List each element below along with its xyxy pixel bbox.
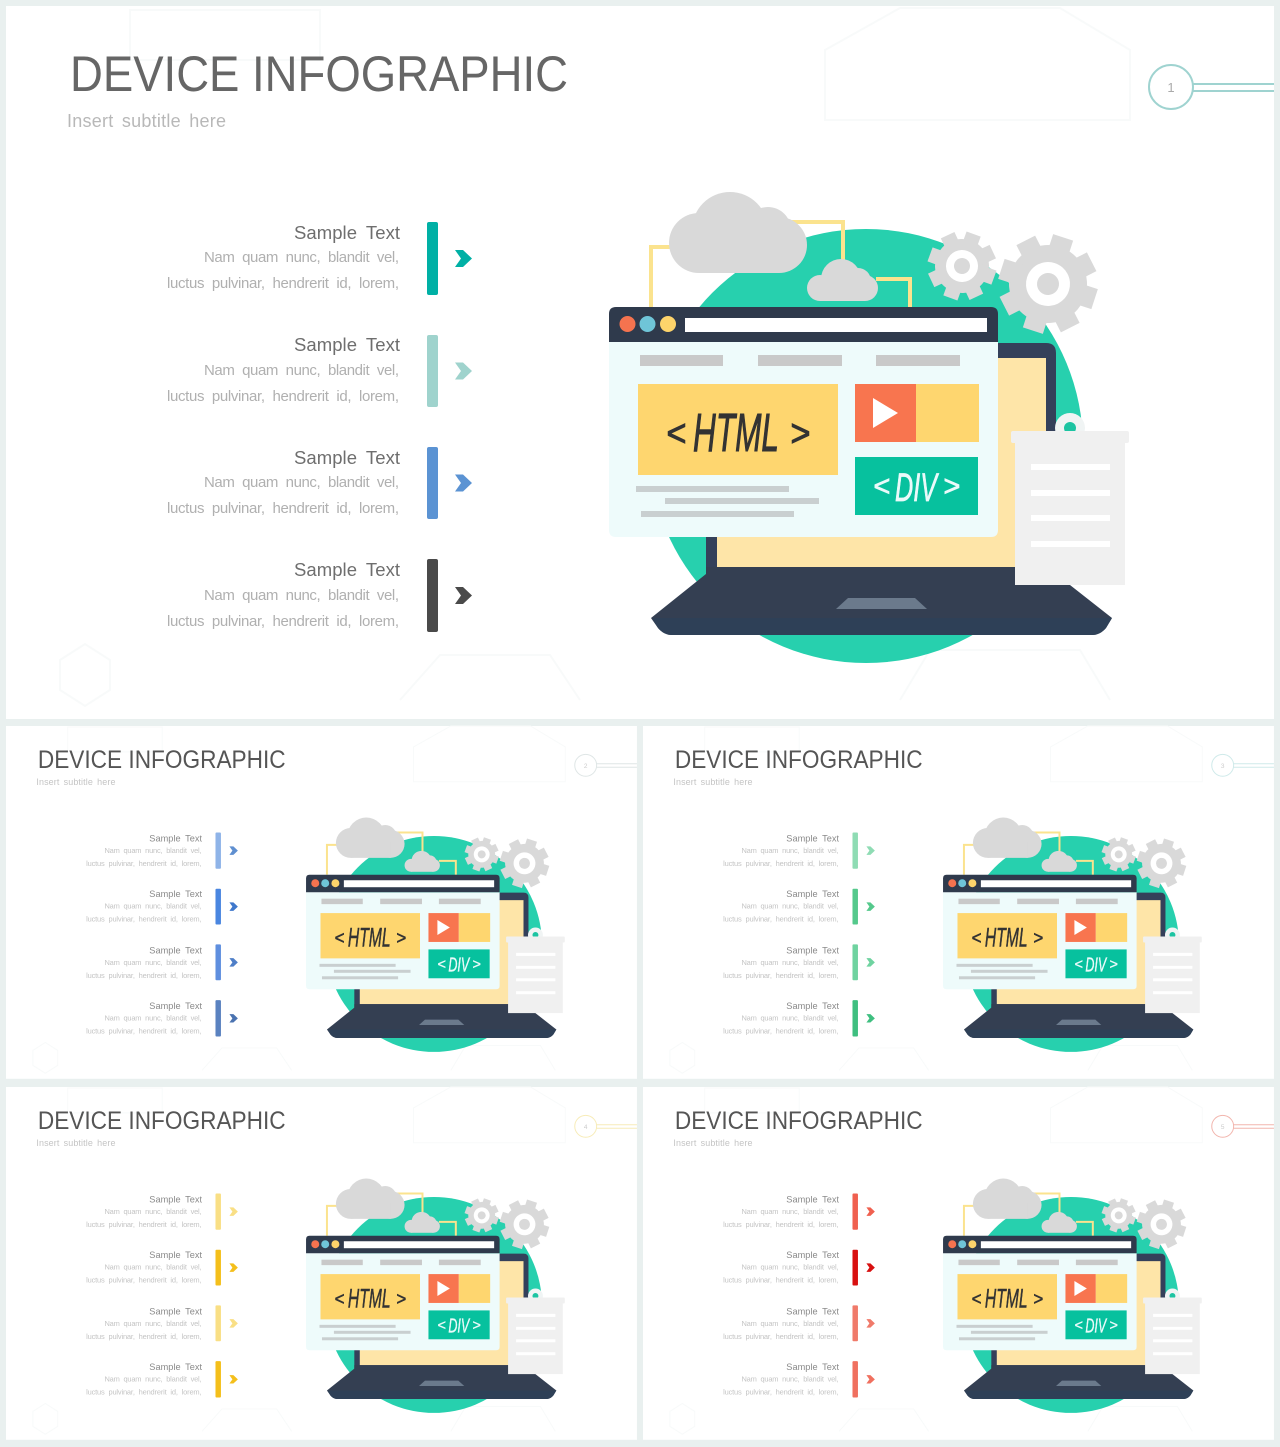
slide 4 illustration: HTML	[348, 1283, 391, 1313]
large gear	[986, 222, 1110, 346]
slide 2 list item 2: luctus pulvinar, hendrerit id, lorem,	[86, 915, 202, 924]
slide 5 list item 4: Nam quam nunc, blandit vel,	[742, 1375, 839, 1384]
list item 3: luctus pulvinar, hendrerit id, lorem,	[167, 500, 399, 517]
slide 3 list item 4: Nam quam nunc, blandit vel,	[742, 1014, 839, 1023]
list item 4: Nam quam nunc, blandit vel,	[204, 587, 399, 604]
slide 5 list item 4	[723, 1361, 875, 1397]
slide 2 list item 4: Sample Text	[149, 1001, 202, 1011]
slide 3 page number badge: 3	[1221, 763, 1225, 770]
slide 3 list item 4: luctus pulvinar, hendrerit id, lorem,	[723, 1027, 839, 1036]
slide 5 list item 3: Nam quam nunc, blandit vel,	[742, 1319, 839, 1328]
slide 2 illustration: HTML	[348, 922, 391, 952]
slide 3 illustration: >	[1033, 928, 1043, 949]
slide 4 illustration: DIV	[448, 1315, 470, 1337]
label: HTML: HTML	[693, 403, 779, 463]
slide 5 list item 1: luctus pulvinar, hendrerit id, lorem,	[723, 1220, 839, 1229]
list item 3: Nam quam nunc, blandit vel,	[204, 474, 399, 491]
slide 5 illustration: >	[1033, 1289, 1043, 1310]
slide 2 illustration	[306, 818, 565, 1052]
slide 3 list item 2: luctus pulvinar, hendrerit id, lorem,	[723, 915, 839, 924]
slide 5 illustration: <	[971, 1289, 981, 1310]
slide 2 page number badge: 2	[584, 763, 588, 770]
slide 5 list item 4: Sample Text	[786, 1362, 839, 1372]
slide 2 list item 1: Sample Text	[149, 833, 202, 843]
large cloud	[669, 192, 807, 273]
list item 1: Sample Text	[294, 222, 400, 243]
list item 1	[167, 222, 472, 295]
slide 5 list item 4: luctus pulvinar, hendrerit id, lorem,	[723, 1388, 839, 1397]
slide 2 list item 4	[86, 1000, 238, 1036]
slide 2 list item 2	[86, 889, 238, 925]
slide 3 list item 1	[723, 832, 875, 869]
slide 2 list item 3: luctus pulvinar, hendrerit id, lorem,	[86, 971, 202, 980]
slide 2 subtitle: Insert subtitle here	[36, 777, 115, 787]
slide 4 page number badge	[575, 1115, 637, 1137]
slide 3 illustration: >	[1109, 956, 1118, 973]
label: HTML: <	[666, 413, 686, 455]
slide 4 list item 3: Nam quam nunc, blandit vel,	[105, 1319, 202, 1328]
slide 3 list item 4	[723, 1000, 875, 1036]
slide 5 list item 2: Nam quam nunc, blandit vel,	[742, 1263, 839, 1272]
slide 4 illustration	[306, 1179, 565, 1413]
slide 2 illustration: DIV	[448, 954, 470, 976]
slide 4 list item 3	[86, 1305, 238, 1341]
panel: slide 4	[6, 1087, 637, 1440]
slide 4 list item 4: luctus pulvinar, hendrerit id, lorem,	[86, 1388, 202, 1397]
slide 4 list item 1: luctus pulvinar, hendrerit id, lorem,	[86, 1220, 202, 1229]
slide 4 illustration: <	[437, 1317, 446, 1334]
slide 2 illustration: >	[472, 956, 481, 973]
slide 2 list item 1: Nam quam nunc, blandit vel,	[105, 846, 202, 855]
list item 1: Nam quam nunc, blandit vel,	[204, 249, 399, 266]
list item 2	[167, 334, 472, 407]
panel: slide 2	[6, 726, 637, 1079]
slide 4 page number badge: 4	[584, 1124, 588, 1131]
slide 5 illustration	[943, 1179, 1202, 1413]
slide 2 list item 2: Nam quam nunc, blandit vel,	[105, 902, 202, 911]
slide 2 list item 2: Sample Text	[149, 889, 202, 899]
slide 4 list item 3: luctus pulvinar, hendrerit id, lorem,	[86, 1332, 202, 1341]
slide 2 illustration: <	[334, 928, 344, 949]
slide 5 illustration: DIV	[1085, 1315, 1107, 1337]
list item 4: Sample Text	[294, 559, 400, 580]
page number badge: 1	[1167, 80, 1175, 95]
laptop base	[651, 567, 1112, 635]
slide 3 list item 3: Nam quam nunc, blandit vel,	[742, 958, 839, 967]
slide 4 illustration: >	[396, 1289, 406, 1310]
list item 3: Sample Text	[294, 447, 400, 468]
slide 2 list item 1: luctus pulvinar, hendrerit id, lorem,	[86, 859, 202, 868]
slide 4 list item 1: Sample Text	[149, 1194, 202, 1204]
illustration: laptop with browser window	[609, 192, 1129, 663]
list item 2: luctus pulvinar, hendrerit id, lorem,	[167, 388, 399, 405]
label: HTML	[666, 403, 810, 463]
list item 3	[167, 447, 472, 519]
subtitle: Insert subtitle here	[67, 111, 226, 131]
slide 5 subtitle: Insert subtitle here	[673, 1138, 752, 1148]
slide 5 illustration: <	[1074, 1317, 1083, 1334]
slide 3 subtitle: Insert subtitle here	[673, 777, 752, 787]
slide 3 list item 2	[723, 889, 875, 925]
laptop screen	[706, 343, 1056, 580]
green background circle	[649, 229, 1083, 663]
browser window	[609, 307, 998, 537]
slide 5 list item 1	[723, 1193, 875, 1230]
slide 3 list item 3	[723, 944, 875, 980]
slide 3 list item 2: Nam quam nunc, blandit vel,	[742, 902, 839, 911]
small gear	[918, 222, 1006, 310]
slide 3 list item 3: luctus pulvinar, hendrerit id, lorem,	[723, 971, 839, 980]
slide 5 list item 3	[723, 1305, 875, 1341]
slide 5 list item 2	[723, 1250, 875, 1286]
label: DIV: DIV	[895, 466, 939, 510]
page number badge	[1149, 65, 1274, 109]
slide 4 list item 2	[86, 1250, 238, 1286]
slide 5 list item 2: Sample Text	[786, 1250, 839, 1260]
slide 3 illustration: HTML	[985, 922, 1028, 952]
label: HTML: >	[790, 413, 810, 455]
label: DIV: >	[943, 470, 960, 503]
slide 2 list item 3	[86, 944, 238, 980]
label: DIV: <	[873, 470, 890, 503]
panel: slide 3	[643, 726, 1274, 1079]
slide 4 list item 4: Sample Text	[149, 1362, 202, 1372]
slide 5 list item 1: Sample Text	[786, 1194, 839, 1204]
slide 3 title: DEVICE INFOGRAPHIC	[675, 746, 923, 774]
slide 5 page number badge	[1212, 1115, 1274, 1137]
slide 5 title: DEVICE INFOGRAPHIC	[675, 1107, 923, 1135]
slide 5 list item 1: Nam quam nunc, blandit vel,	[742, 1207, 839, 1216]
slide 2 list item 4: luctus pulvinar, hendrerit id, lorem,	[86, 1027, 202, 1036]
slide 4 list item 4	[86, 1361, 238, 1397]
slide 4 illustration: <	[334, 1289, 344, 1310]
slide 2 list item 3: Nam quam nunc, blandit vel,	[105, 958, 202, 967]
slide 3 list item 1: Nam quam nunc, blandit vel,	[742, 846, 839, 855]
yellow connector lines	[651, 222, 910, 307]
slide 5 page number badge: 5	[1221, 1124, 1225, 1131]
slide 5 list item 3: Sample Text	[786, 1306, 839, 1316]
slide 2 illustration: >	[396, 928, 406, 949]
slide 5 illustration: HTML	[985, 1283, 1028, 1313]
slide 3 list item 1: Sample Text	[786, 833, 839, 843]
slide 3 list item 2: Sample Text	[786, 889, 839, 899]
slide 4 list item 3: Sample Text	[149, 1306, 202, 1316]
list item 4: luctus pulvinar, hendrerit id, lorem,	[167, 613, 399, 630]
slide 5 illustration: >	[1109, 1317, 1118, 1334]
slide 4 subtitle: Insert subtitle here	[36, 1138, 115, 1148]
slide 2 list item 3: Sample Text	[149, 945, 202, 955]
clipboard document	[1011, 413, 1129, 585]
slide 3 list item 1: luctus pulvinar, hendrerit id, lorem,	[723, 859, 839, 868]
list item 4	[167, 559, 472, 632]
slide 2 list item 4: Nam quam nunc, blandit vel,	[105, 1014, 202, 1023]
slide 4 list item 4: Nam quam nunc, blandit vel,	[105, 1375, 202, 1384]
list item 2: Sample Text	[294, 334, 400, 355]
slide 2 list item 1	[86, 832, 238, 869]
slide 3 illustration: <	[1074, 956, 1083, 973]
slide 4 list item 1	[86, 1193, 238, 1230]
slide 3 page number badge	[1212, 754, 1274, 776]
slide 3 illustration: <	[971, 928, 981, 949]
slide 5 list item 2: luctus pulvinar, hendrerit id, lorem,	[723, 1276, 839, 1285]
list item 2: Nam quam nunc, blandit vel,	[204, 362, 399, 379]
small cloud	[807, 259, 878, 301]
slide 4 list item 1: Nam quam nunc, blandit vel,	[105, 1207, 202, 1216]
slide 2 title: DEVICE INFOGRAPHIC	[38, 746, 286, 774]
slide 2 illustration: <	[437, 956, 446, 973]
slide 3 illustration	[943, 818, 1202, 1052]
slide 2 page number badge	[575, 754, 637, 776]
title: DEVICE INFOGRAPHIC	[70, 46, 568, 102]
slide 3 list item 3: Sample Text	[786, 945, 839, 955]
list item 1: luctus pulvinar, hendrerit id, lorem,	[167, 275, 399, 292]
slide 5 list item 3: luctus pulvinar, hendrerit id, lorem,	[723, 1332, 839, 1341]
slide 3 illustration: DIV	[1085, 954, 1107, 976]
slide 4 list item 2: luctus pulvinar, hendrerit id, lorem,	[86, 1276, 202, 1285]
slide 4 list item 2: Nam quam nunc, blandit vel,	[105, 1263, 202, 1272]
panel: slide 5	[643, 1087, 1274, 1440]
slide 4 list item 2: Sample Text	[149, 1250, 202, 1260]
slide 4 title: DEVICE INFOGRAPHIC	[38, 1107, 286, 1135]
slide 4 illustration: >	[472, 1317, 481, 1334]
slide 3 list item 4: Sample Text	[786, 1001, 839, 1011]
